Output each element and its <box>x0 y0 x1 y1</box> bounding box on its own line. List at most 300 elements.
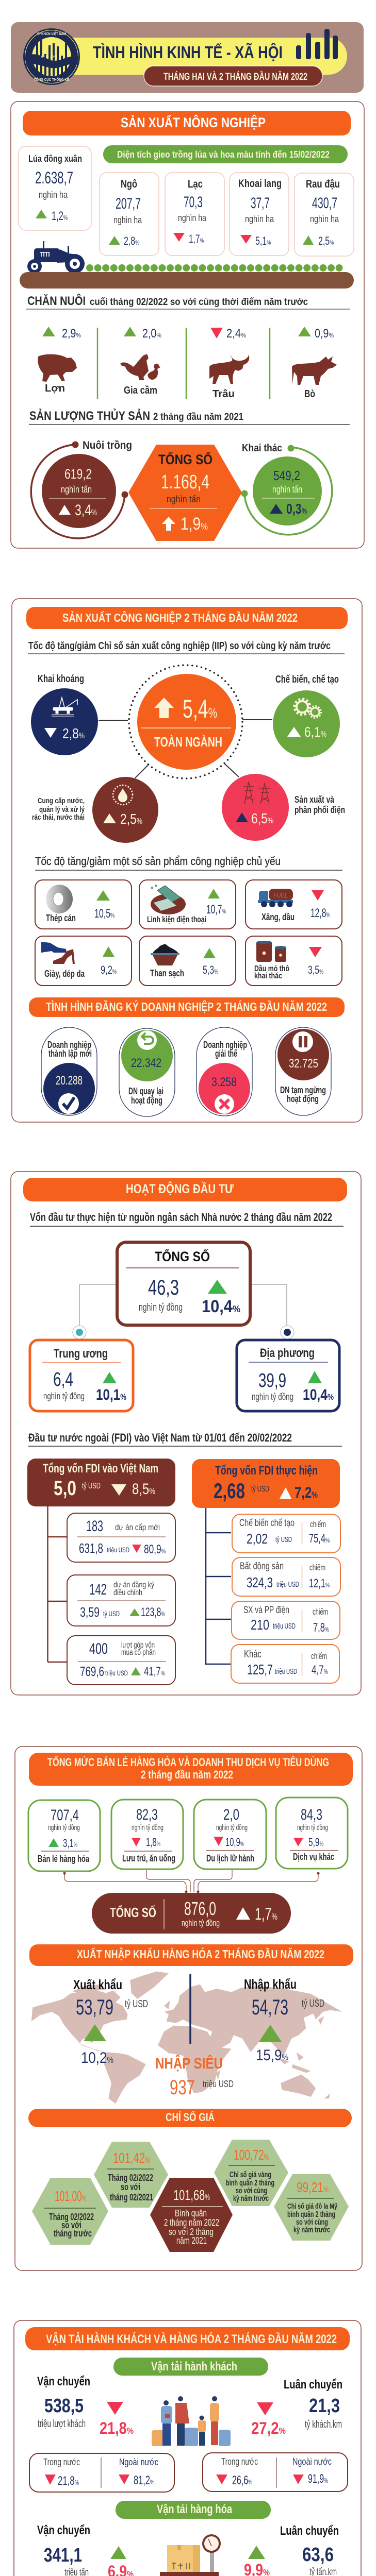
card: total investment: 10,4% <box>202 1297 240 1316</box>
hexagon: CPI month on month: so với <box>61 2220 81 2230</box>
stat: freight carried: Vận chuyển <box>37 2523 90 2537</box>
icon: tractor <box>27 241 85 274</box>
heading: business registration <box>29 997 345 1017</box>
stat: poultry: 2,0% <box>142 327 161 341</box>
stat pill: returning enterprises: 22.342 <box>131 1056 161 1070</box>
card: real estate FDI: 12,1% <box>309 1577 330 1590</box>
heading: fishery output: SẢN LƯỢNG THỦY SẢN <box>29 408 150 423</box>
stat: water and waste: 2,5% <box>120 811 142 827</box>
card: new projects <box>67 1513 175 1562</box>
stat pill: returning enterprises: hoạt động <box>131 1095 162 1106</box>
chart: whole industry: TOÀN NGÀNH <box>154 734 222 750</box>
card: central <box>30 1340 133 1411</box>
card: retail goods: 3,1% <box>63 1837 77 1850</box>
hexagon: USD price: so với cùng <box>296 2218 328 2227</box>
card: new projects: 631,8 <box>79 1540 103 1556</box>
stat: imports: tỷ USD <box>302 1998 324 2009</box>
card: power FDI: 210 <box>251 1617 269 1633</box>
stat: water and waste: quản lý và xử lý <box>39 805 85 814</box>
hexagon: CPI month on month: tháng trước <box>54 2228 92 2239</box>
card: adjusted projects: 142 <box>89 1581 107 1598</box>
card: phone components: 10,7% <box>206 903 226 917</box>
card: real estate FDI: triệu USD <box>276 1580 299 1589</box>
stat: exports: 53,79 <box>76 1995 113 2019</box>
icon: fuel truck: FUEL <box>273 891 288 899</box>
stat card: maize: 207,7 <box>116 195 141 212</box>
icon: shoes <box>41 942 75 964</box>
stat: passenger traffic: Luân chuyển <box>284 2378 342 2392</box>
chart: aquaculture <box>31 439 132 538</box>
stat: freight carried: 341,1 <box>44 2545 82 2566</box>
sub-heading: passenger transport <box>113 2358 268 2376</box>
card: local <box>237 1340 339 1411</box>
icon: oil rig <box>52 698 77 716</box>
stat: power: 6,5% <box>251 810 273 826</box>
icon: cross <box>215 1094 234 1114</box>
card: petrol <box>246 880 342 929</box>
stat: trade deficit: triệu USD <box>203 2079 234 2089</box>
stat: imports <box>244 1976 324 2064</box>
hexagon: average CPI: Bình quân <box>175 2208 207 2218</box>
stat pill: returning enterprises <box>119 1028 175 1116</box>
stat: cattle: Bò <box>304 388 315 400</box>
card: capital contributions: mua cổ phần <box>121 1648 156 1657</box>
card: total FDI: tỷ USD <box>82 1482 101 1490</box>
stat card: maize: Ngô <box>121 178 137 190</box>
card: passengers carried split <box>29 2453 174 2492</box>
icon: bar chart <box>296 29 338 59</box>
card: local: nghìn tỷ đồng <box>252 1392 293 1402</box>
stat pill: suspended enterprises <box>275 1027 331 1115</box>
stat pill: dissolved enterprises: giải thể <box>215 1048 237 1059</box>
icon: buffalo <box>209 355 249 384</box>
card: passengers carried split: Ngoài nước <box>119 2457 158 2467</box>
stat: cattle: 0,9% <box>315 327 334 341</box>
hexagon: average CPI: 101,68% <box>173 2187 210 2203</box>
card: manufacturing FDI: 2,02 <box>247 1531 268 1547</box>
heading: price index: CHỈ SỐ GIÁ <box>166 2110 215 2124</box>
card: other services: 5,9% <box>308 1836 323 1849</box>
stat card: peanut: 1,7% <box>189 232 204 245</box>
stat: passengers carried: 21,8% <box>100 2419 134 2437</box>
hexagon: CPI month on month: Tháng 02/2022 <box>49 2212 94 2222</box>
card: retail goods: 707,4 <box>51 1807 79 1824</box>
stat card: winter-spring rice: 2.638,7 <box>35 168 73 187</box>
chart: aquaculture: nghìn tấn <box>61 484 92 495</box>
card: crude oil: khai thác <box>254 972 282 980</box>
stat pill: suspended enterprises: DN tạm ngừng <box>280 1085 326 1095</box>
stat: buffalo: 2,4% <box>226 327 246 341</box>
chart: capture fishery: 0,3% <box>286 501 307 517</box>
card: disbursed FDI <box>192 1459 340 1508</box>
sub-heading: key products: Tốc độ tăng/giảm một số sản phẩm công nghiệp chủ yếu <box>35 855 281 868</box>
callout: retail total: TỔNG SỐ <box>110 1905 156 1920</box>
card: total investment: TỔNG SỐ <box>155 1248 210 1264</box>
icon: statistics office logo: CHXHCN VIỆT NAM <box>37 31 66 36</box>
stat card: maize <box>100 173 159 256</box>
stat: trade deficit: 937 <box>170 2076 195 2099</box>
card: accommodation: 82,3 <box>136 1806 158 1823</box>
card: passengers carried split: Trong nước <box>43 2457 80 2467</box>
card: manufacturing FDI: Chế biến chế tạo <box>239 1518 295 1529</box>
stat: mining: 2,8% <box>62 725 85 741</box>
card: real estate FDI: chiếm <box>309 1563 325 1572</box>
stat: poultry <box>120 327 161 396</box>
card: passengers carried split: 21,8% <box>58 2474 79 2488</box>
panel: transport and tourism <box>14 2320 361 2576</box>
icon: statistics office logo: TỔNG CỤC THỐNG KÊ <box>34 77 69 82</box>
hexagon: USD price: kỳ năm trước <box>293 2226 330 2234</box>
arrows: components to total <box>63 1870 319 1893</box>
stat pill: dissolved enterprises <box>197 1027 252 1116</box>
card: coal <box>139 936 236 986</box>
icon: statistics office logo <box>23 28 80 85</box>
panel: industry <box>12 599 362 1122</box>
stat card: peanut: 70,3 <box>184 194 203 211</box>
card: disbursed FDI: 7,2% <box>295 1484 318 1501</box>
card: local: 10,4% <box>303 1386 334 1403</box>
icon: steel coil <box>46 885 73 913</box>
icon: oil barrels <box>256 941 286 962</box>
card: power FDI <box>232 1601 340 1639</box>
icon: coal basket <box>151 944 179 965</box>
hexagon: CPI month on month <box>32 2178 108 2245</box>
stat card: vegetables: 2,5% <box>318 234 334 247</box>
stat card: maize: 2,8% <box>124 234 139 247</box>
card: retail goods: nghìn tỷ đồng <box>48 1823 80 1832</box>
stat: mining <box>31 673 98 755</box>
callout: retail total: 876,0 <box>184 1898 216 1919</box>
stat card: peanut: nghìn ha <box>178 213 207 223</box>
card: petrol: Xăng, dầu <box>261 912 295 922</box>
stat: passenger traffic: tỷ khách.km <box>305 2419 342 2430</box>
card: coal: Than sạch <box>150 968 184 978</box>
card: adjusted projects: dự án đăng ký <box>113 1581 154 1589</box>
card: total FDI <box>27 1459 175 1506</box>
hexagon: average CPI: so với 2 tháng <box>169 2227 214 2237</box>
chart: aquaculture: 3,4% <box>75 502 97 519</box>
heading: transport <box>25 2327 350 2350</box>
stat: trade deficit: NHẬP SIÊU <box>155 2055 223 2072</box>
icon: check mark <box>58 1093 79 1114</box>
stat pill: new enterprises: Doanh nghiệp <box>47 1040 91 1050</box>
stat pill: returning enterprises: DN quay lại <box>128 1086 164 1096</box>
hexagon: CPI year on year <box>94 2142 168 2208</box>
card: disbursed FDI: 2,68 <box>214 1479 245 1503</box>
stat: passenger traffic: 21,3 <box>309 2395 340 2417</box>
callout: retail total: nghìn tỷ đồng <box>182 1918 220 1928</box>
stat: pigs: Lợn <box>45 383 65 394</box>
card: capital contributions <box>67 1636 175 1685</box>
card: disbursed FDI: tỷ USD <box>251 1485 269 1494</box>
stat: imports: Nhập khẩu <box>244 1976 297 1992</box>
card: new projects: 80,9% <box>144 1543 166 1556</box>
hexagon: gold price: Chỉ số giá vàng <box>230 2171 271 2179</box>
card: manufacturing FDI: chiếm <box>310 1519 326 1529</box>
panel: retail trade and prices <box>15 1747 362 2270</box>
card: capital contributions: 400 <box>89 1640 108 1657</box>
heading: fishery output <box>29 408 350 425</box>
stat: passenger traffic <box>251 2378 342 2437</box>
sub-heading: passenger transport: Vận tải hành khách <box>151 2360 237 2374</box>
chart: whole industry <box>129 665 242 778</box>
connector nodes <box>73 1326 294 1339</box>
icon: pause <box>292 1031 313 1052</box>
card: other FDI: 4,7% <box>312 1663 328 1677</box>
card: power FDI: chiếm <box>313 1607 328 1617</box>
card: total FDI: 5,0 <box>54 1477 76 1500</box>
stat card: vegetables: nghìn ha <box>310 214 339 224</box>
card: central: 6,4 <box>53 1369 73 1391</box>
stat: freight carried <box>37 2523 134 2576</box>
icon: travellers with luggage <box>152 2396 231 2446</box>
hexagon: gold price <box>214 2140 288 2206</box>
card: travel: 2,0 <box>223 1806 239 1823</box>
heading: retail sales <box>29 1753 353 1786</box>
card: retail goods: Bán lẻ hàng hóa <box>38 1854 90 1864</box>
card: phone components <box>139 880 236 929</box>
hexagon: USD price <box>274 2174 349 2241</box>
icon: power towers <box>243 782 270 804</box>
icon: water drop <box>113 785 133 805</box>
heading: livestock <box>26 294 350 309</box>
stat: water and waste: rác thải, nước thải <box>32 813 85 822</box>
stat: power: Sản xuất và <box>295 794 335 805</box>
card: total investment: nghìn tỷ đồng <box>139 1302 183 1313</box>
card: capital contributions: lượt góp vốn <box>121 1641 155 1650</box>
card: footwear: Giày, dép da <box>44 969 85 979</box>
stat: passengers carried <box>37 2375 134 2437</box>
card: local: Địa phương <box>260 1346 315 1360</box>
card: manufacturing FDI: tỷ USD <box>275 1535 292 1544</box>
stat pill: new enterprises <box>41 1027 97 1115</box>
card: capital contributions: 41,7% <box>144 1665 165 1679</box>
card: power FDI: triệu USD <box>273 1622 296 1631</box>
card: crude oil: Dầu mỏ thô <box>254 964 289 973</box>
sub-heading: FDI: Đầu tư nước ngoài (FDI) vào Việt Nam từ 01/01 đến 20/02/2022 <box>28 1431 292 1444</box>
stat pill: dissolved enterprises: 3.258 <box>211 1075 237 1089</box>
stat: pigs: 2,9% <box>62 327 81 341</box>
stat: water and waste: Cung cấp nước, <box>38 796 85 805</box>
chart: capture fishery: 549,2 <box>273 468 300 483</box>
card: petrol: 12,8% <box>310 906 330 920</box>
card: new projects: dự án cấp mới <box>115 1522 160 1532</box>
heading: import export <box>29 1944 353 1966</box>
hexagon: gold price: bình quân 2 tháng <box>226 2179 274 2188</box>
card: real estate FDI: Bất động sản <box>240 1561 284 1572</box>
card: accommodation: Lưu trú, ăn uống <box>122 1853 175 1863</box>
icon: gears <box>295 699 321 718</box>
stat: power: phân phối điện <box>295 805 345 815</box>
soil strip <box>20 272 354 289</box>
icon: phone parts <box>151 885 186 914</box>
card: capital contributions: 769,6 <box>80 1664 104 1679</box>
stat pill: dissolved enterprises: Doanh nghiệp <box>203 1040 247 1050</box>
hexagon: gold price: 100,72% <box>234 2147 269 2163</box>
heading: retail sales: 2 tháng đầu năm 2022 <box>141 1768 233 1781</box>
card: new projects: 183 <box>86 1518 103 1535</box>
card: adjusted projects: 3,59 <box>80 1604 100 1620</box>
stat: exports <box>73 1977 148 2066</box>
hexagon: average CPI: 2 tháng năm 2022 <box>164 2217 219 2228</box>
stat pill: suspended enterprises: hoạt động <box>287 1094 319 1104</box>
stat: manufacturing <box>273 674 340 757</box>
stat card: peanut <box>165 173 224 256</box>
sub-heading: freight transport: Vận tải hàng hóa <box>157 2502 232 2516</box>
card: coal: 5,3% <box>203 963 218 976</box>
stat: imports: 54,73 <box>252 1995 288 2019</box>
card: central: 10,1% <box>96 1386 126 1403</box>
card: travel: 10,9% <box>225 1836 244 1849</box>
card: crude oil <box>246 936 342 986</box>
card: passenger traffic split: Ngoài nước <box>292 2456 332 2467</box>
icon: parcel on scale <box>160 2535 220 2576</box>
icon: fuel truck <box>258 889 293 907</box>
card: other FDI: chiếm <box>311 1651 327 1661</box>
heading: livestock: CHĂN NUÔI <box>27 294 86 308</box>
heading: industrial production <box>26 607 348 629</box>
stat card: vegetables: Rau đậu <box>306 178 340 190</box>
stat card: winter-spring rice: Lúa đông xuân <box>28 154 82 164</box>
card: rolled steel <box>35 880 132 929</box>
card: power FDI: 7,8% <box>313 1621 329 1635</box>
subtitle pill: THÁNG HAI VÀ 2 THÁNG ĐẦU NĂM 2022 <box>164 71 307 82</box>
heading: industrial production: SẢN XUẤT CÔNG NGHIỆP 2 THÁNG ĐẦU NĂM 2022 <box>62 610 298 624</box>
stat: manufacturing: 6,1% <box>304 724 326 740</box>
hexagon: CPI month on month: 101,00% <box>55 2188 86 2204</box>
chart: capture fishery: nghìn tấn <box>272 484 302 495</box>
subtitle pill <box>144 66 322 86</box>
panel: agriculture <box>11 101 364 548</box>
card: central: nghìn tỷ đồng <box>43 1391 85 1401</box>
chart: capture fishery: Khai thác <box>242 443 282 454</box>
stat card: winter-spring rice: 1,2% <box>52 209 68 223</box>
stat: passenger traffic: 27,2% <box>251 2419 286 2437</box>
card: other services: 84,3 <box>301 1806 322 1823</box>
title: TÌNH HÌNH KINH TẾ - XÃ HỘI <box>93 42 283 62</box>
stat card: sweet potato: Khoai lang <box>238 178 282 190</box>
hexagon: CPI year on year: tháng 02/2021 <box>110 2192 153 2202</box>
stat card: sweet potato: 37,7 <box>251 195 270 212</box>
card: other FDI: triệu USD <box>275 1667 297 1676</box>
card: adjusted projects: điều chỉnh <box>113 1588 142 1597</box>
card: passenger traffic split: 26,6% <box>232 2473 252 2487</box>
icon: cow <box>292 357 337 385</box>
stat: buffalo <box>209 327 249 400</box>
hexagon: gold price: kỳ năm trước <box>233 2194 269 2203</box>
hexagon: CPI year on year: Tháng 02/2022 <box>108 2173 153 2183</box>
card: passenger traffic split: 91,9% <box>308 2472 328 2486</box>
card: other FDI: Khác <box>244 1649 261 1660</box>
hexagon: average CPI: năm 2021 <box>176 2235 207 2246</box>
stat card: sweet potato: 5,1% <box>255 234 271 247</box>
card: new projects: triệu USD <box>107 1546 129 1554</box>
card: total investment: 46,3 <box>148 1275 179 1299</box>
stat pill: new enterprises: 20.288 <box>56 1074 83 1088</box>
card: adjusted projects <box>67 1575 175 1626</box>
sub-heading: sown area <box>103 145 348 163</box>
heading: investment: HOẠT ĐỘNG ĐẦU TƯ <box>126 1181 234 1196</box>
card: rolled steel: Thép cán <box>46 913 76 923</box>
chart: aquaculture: Nuôi trồng <box>83 439 132 451</box>
card: capital contributions: triệu USD <box>105 1669 128 1677</box>
chart: world map <box>31 1972 342 2104</box>
stat card: sweet potato <box>230 173 289 256</box>
hexagon: CPI year on year: so với <box>121 2182 140 2192</box>
stat: mining: Khai khoáng <box>38 673 84 685</box>
hexagon: average CPI <box>150 2178 233 2252</box>
sub-heading: sown area: Diện tích gieo trồng lúa và hoa màu tính đến 15/02/2022 <box>117 149 330 160</box>
stat card: sweet potato: nghìn ha <box>245 214 274 224</box>
heading: investment <box>23 1178 347 1201</box>
stat pill: new enterprises: thành lập mới <box>48 1048 92 1059</box>
card: footwear: 9,2% <box>101 963 117 976</box>
stat: passengers carried: Vận chuyển <box>37 2375 90 2388</box>
card: disbursed FDI: Tổng vốn FDI thực hiện <box>215 1464 318 1478</box>
chart: total fishery hexagon <box>128 445 242 541</box>
hexagon: USD price: 99,21% <box>297 2179 329 2195</box>
stat: cattle <box>292 327 337 400</box>
card: total FDI: 8,5% <box>132 1481 155 1498</box>
card: travel <box>194 1800 266 1869</box>
chart: total fishery hexagon: nghìn tấn <box>167 494 201 504</box>
card: other services: Dịch vụ khác <box>293 1852 334 1862</box>
chart: total fishery hexagon: 1.168,4 <box>161 471 209 493</box>
stat: imports: 15,9% <box>256 2047 288 2064</box>
stat card: vegetables <box>295 173 354 256</box>
hexagon: CPI year on year: 101,42% <box>113 2150 150 2166</box>
card: rolled steel: 10,5% <box>94 907 115 921</box>
stat card: peanut: Lạc <box>188 178 203 190</box>
heading: price index <box>28 2109 352 2127</box>
heading: agricultural production: SẢN XUẤT NÔNG NGHIỆP <box>121 114 266 130</box>
card: travel: nghìn tỷ đồng <box>216 1823 248 1832</box>
heading: livestock: cuối tháng 02/2022 so với cùng thời điểm năm trước <box>90 297 308 308</box>
card: crude oil: 3,5% <box>308 963 323 976</box>
card: total FDI: Tổng vốn FDI vào Việt Nam <box>43 1462 158 1476</box>
stat card: winter-spring rice <box>19 146 91 230</box>
card: passengers carried split: 81,2% <box>134 2473 154 2487</box>
icon: up arrow <box>154 698 174 718</box>
card: other FDI <box>231 1645 339 1683</box>
card: manufacturing FDI <box>232 1514 340 1553</box>
heading: fishery output: 2 tháng đầu năm 2021 <box>153 412 243 422</box>
stat: poultry: Gia cầm <box>124 385 157 396</box>
chart: capture fishery <box>241 443 332 535</box>
stat: exports: tỷ USD <box>125 1998 148 2010</box>
stat: manufacturing: Chế biến, chế tạo <box>275 674 339 685</box>
card: adjusted projects: 123,8% <box>141 1605 165 1619</box>
card: other FDI: 125,7 <box>247 1662 273 1677</box>
card: passenger traffic split: Trong nước <box>221 2456 258 2467</box>
stat card: maize: nghìn ha <box>113 215 142 225</box>
icon: return arrow <box>137 1030 157 1050</box>
card: retail goods <box>28 1800 100 1871</box>
icon: up arrow <box>162 517 175 531</box>
stat: freight traffic: Luân chuyển <box>280 2524 339 2538</box>
divider: map <box>189 1974 191 2044</box>
card: real estate FDI: 324,3 <box>247 1574 273 1590</box>
stat: passengers carried: triệu lượt khách <box>38 2418 86 2430</box>
card: travel: Du lịch lữ hành <box>206 1853 254 1863</box>
header banner <box>11 22 364 93</box>
card: central: Trung ương <box>54 1347 108 1361</box>
heading: agricultural production <box>23 111 351 135</box>
stat: pigs <box>38 327 81 394</box>
chart: aquaculture: 619,2 <box>64 466 92 482</box>
card: other services: nghìn tỷ đồng <box>297 1823 328 1832</box>
callout: retail total: 1,7% <box>255 1905 277 1923</box>
